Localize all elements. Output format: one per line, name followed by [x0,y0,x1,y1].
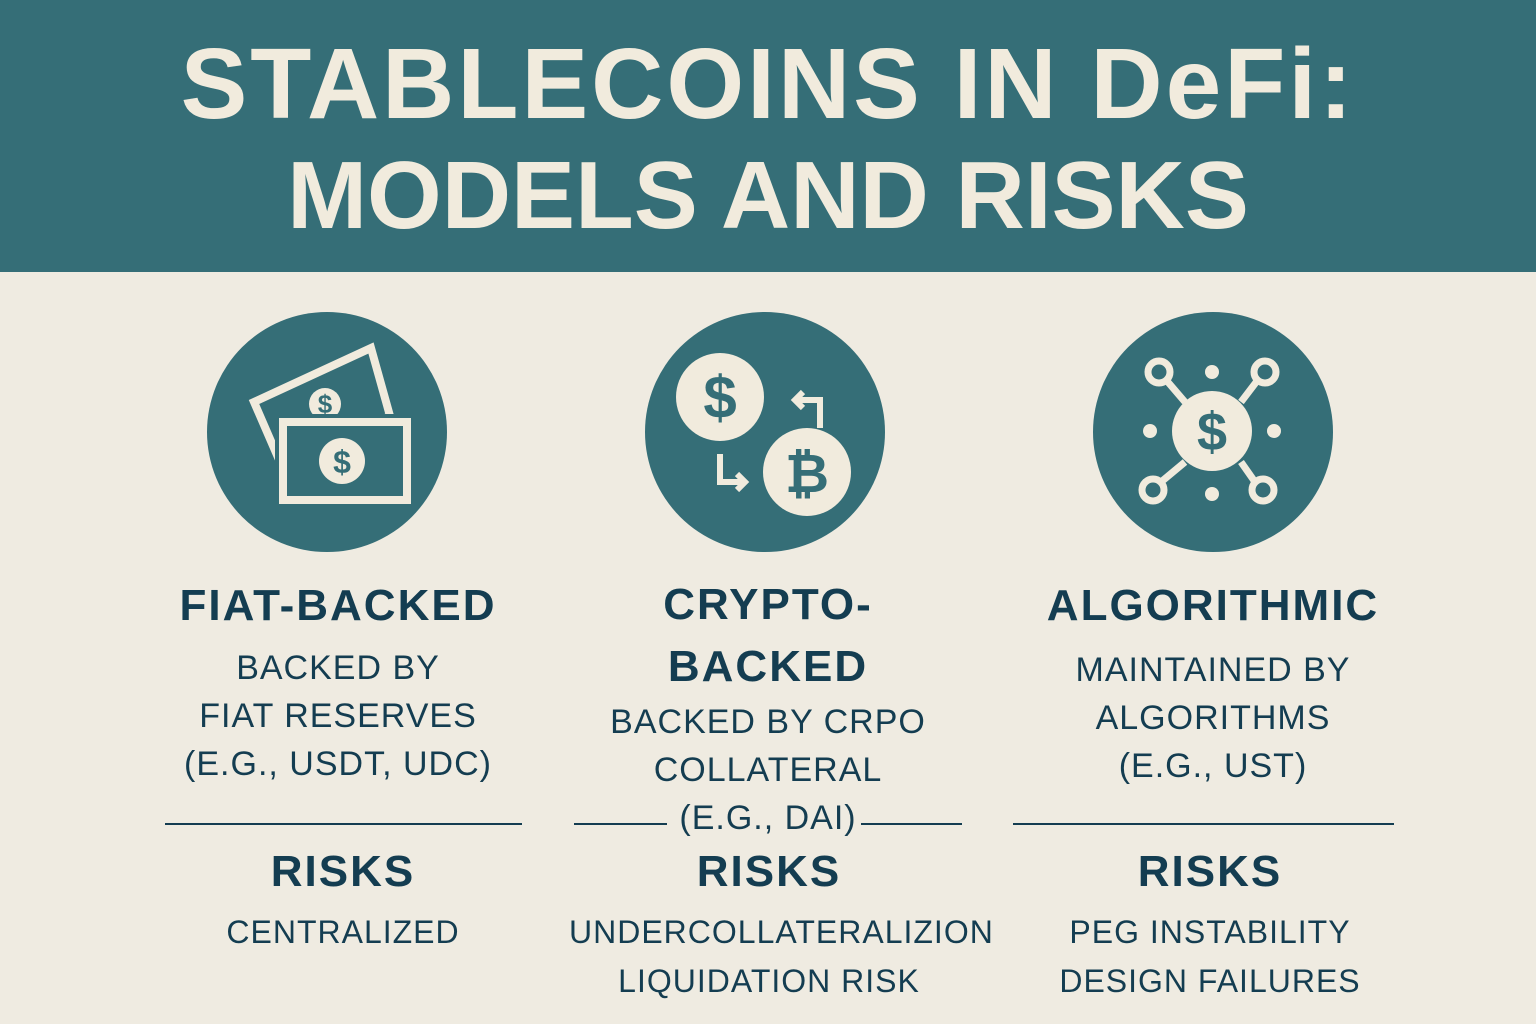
risks: crypto [569,847,994,999]
column: fiat-backed [180,581,496,783]
column: algorithmic: ALGORITHMIC [1047,581,1379,630]
icon: fiat money: $ [318,389,333,419]
risks: algorithmic: PEG INSTABILITY [1069,914,1351,950]
risks: crypto: LIQUIDATION RISK [618,963,920,999]
risks: fiat: CENTRALIZED [226,914,460,950]
icon: crypto exchange [645,312,885,552]
column: algorithmic: (E.G., UST) [1119,747,1307,785]
column: fiat-backed: (E.G., USDT, UDC) [184,745,492,783]
column: algorithmic [1047,581,1379,785]
icon: fiat money: $ [333,444,351,480]
risks: algorithmic [1059,847,1361,999]
header banner [0,0,1536,272]
icon: crypto exchange: $ [703,364,737,431]
risks: crypto: UNDERCOLLATERALIZION [569,914,994,950]
column: fiat-backed: FIAT RESERVES [199,697,477,735]
icon: fiat money [207,312,447,552]
risks: algorithmic: RISKS [1138,847,1282,896]
title line 1: STABLECOINS IN DeFi: [181,28,1355,140]
column: fiat-backed: BACKED BY [236,649,440,687]
icon: algorithmic network [1093,312,1333,552]
column: crypto-backed: (E.G., DAI) [679,799,857,837]
icon: algorithmic network: $ [1197,402,1227,462]
risks: algorithmic: DESIGN FAILURES [1059,963,1361,999]
column: crypto-backed [610,580,926,837]
title line 2: MODELS AND RISKS [287,142,1249,249]
risks: crypto: RISKS [697,847,841,896]
column: algorithmic: ALGORITHMS [1096,699,1330,737]
column: fiat-backed: FIAT-BACKED [180,581,496,630]
column: crypto-backed: COLLATERAL [654,751,882,789]
icon: crypto exchange: ₿ [785,444,829,504]
column: crypto-backed: CRYPTO- [663,580,873,629]
column: crypto-backed: BACKED BY CRPO [610,703,926,741]
column: algorithmic: MAINTAINED BY [1076,651,1350,689]
risks: fiat [226,847,460,950]
column: crypto-backed: BACKED [668,642,868,691]
risks: fiat: RISKS [271,847,415,896]
